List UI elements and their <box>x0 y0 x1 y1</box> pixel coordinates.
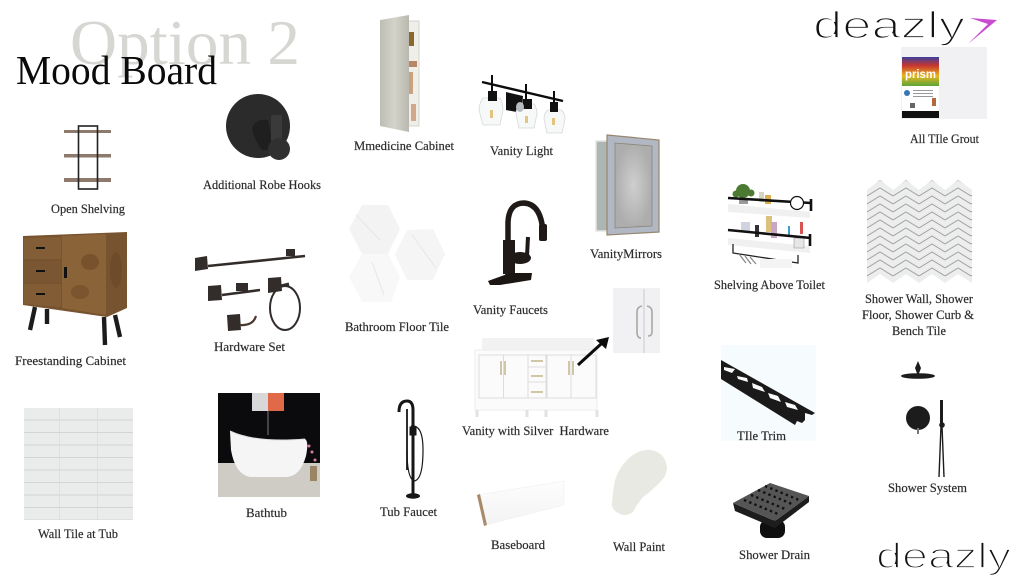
icon: wall shelves with accessories <box>728 184 811 268</box>
label: Bathtub <box>246 506 287 520</box>
icon: square black drain <box>733 483 809 538</box>
arrow: points to door detail <box>578 337 609 365</box>
icon: black metal trim strip <box>721 345 816 441</box>
label: three-line caption: Shower Wall, Shower <box>865 292 974 306</box>
item: vanity door detail <box>613 288 660 353</box>
icon: herringbone marble mosaic <box>867 180 972 283</box>
label: three-line caption: Floor, Shower Curb & <box>862 308 974 322</box>
item: shower wall and floor tile <box>862 180 974 338</box>
item: vanity mirrors <box>590 135 662 261</box>
label: Shower Drain <box>739 548 811 562</box>
item: shower system <box>888 361 967 495</box>
icon: floor-mounted black tub filler <box>399 401 423 498</box>
item: hardware set <box>195 249 305 354</box>
logo: deazly with pink arrow <box>813 5 997 47</box>
item: freestanding cabinet <box>15 232 127 368</box>
label: Mmedicine Cabinet <box>354 139 455 153</box>
title: Mood Board: Mood Board <box>16 47 217 93</box>
item: vanity faucets <box>473 203 548 317</box>
icon: white subway tile <box>24 408 133 520</box>
icon: three-tier shelf <box>64 126 111 189</box>
icon: towel bar, paper holder, hook and ring <box>195 249 305 331</box>
label: Tub Faucet <box>380 505 438 519</box>
label: Freestanding Cabinet <box>15 354 127 368</box>
item: shower drain <box>733 483 811 562</box>
icon: white baseboard piece <box>477 481 564 526</box>
label: three-line caption <box>862 292 974 338</box>
icon: three-globe black light <box>479 75 565 133</box>
item: vanity light <box>479 75 565 158</box>
icon: round black hook <box>226 94 290 160</box>
icon: open mirrored cabinet <box>380 15 419 132</box>
label: Vanity Faucets <box>473 303 548 317</box>
label: VanityMirrors <box>590 247 662 261</box>
logo: deazly with pink arrow: deazly <box>813 5 965 47</box>
logo: deazly footer: deazly <box>876 535 1011 576</box>
icon: rain head, valve and handheld <box>901 361 945 477</box>
label: Hardware Set <box>214 340 286 354</box>
label: TIle Trim <box>737 429 786 443</box>
item: all tile grout <box>901 47 987 146</box>
item: wall paint <box>612 450 667 554</box>
item: additional robe hooks <box>203 94 321 192</box>
item: open shelving <box>51 126 126 216</box>
item: tile trim <box>721 345 816 443</box>
item: medicine cabinet <box>354 15 455 153</box>
label: Baseboard <box>491 538 546 552</box>
icon: prism grout box: prism <box>905 67 936 81</box>
icon: rustic wood cabinet <box>23 232 127 345</box>
item: vanity with silver hardware <box>462 337 609 438</box>
icon: white double vanity <box>475 338 597 417</box>
item: wall tile at tub <box>24 408 133 541</box>
item: baseboard <box>477 481 564 552</box>
icon: white paint swatch <box>612 450 667 515</box>
icon: framed mirror cabinet <box>596 135 659 235</box>
icon: freestanding tub photo <box>218 393 320 497</box>
label: three-line caption: Bench Tile <box>892 324 946 338</box>
item: bathroom floor tile <box>345 205 449 334</box>
icon: dark bronze pull-down faucet <box>488 203 547 285</box>
icon: hexagonal marble tiles <box>349 205 445 302</box>
item: bathtub <box>218 393 320 520</box>
icon: cabinet door close-up with silver handles <box>613 288 660 353</box>
label: Open Shelving <box>51 202 126 216</box>
label: All TIle Grout <box>910 132 979 146</box>
subtitle: Option 2: Option 2 <box>70 8 300 78</box>
label: Bathroom Floor Tile <box>345 320 449 334</box>
label: Vanity with Silver Hardware <box>462 424 609 438</box>
item: shelving above toilet <box>714 184 826 292</box>
label: Wall Paint <box>613 540 666 554</box>
item: tub faucet <box>380 401 438 519</box>
label: Shower System <box>888 481 967 495</box>
label: Vanity Light <box>490 144 554 158</box>
label: Additional Robe Hooks <box>203 178 321 192</box>
label: Wall Tile at Tub <box>38 527 118 541</box>
label: Shelving Above Toilet <box>714 278 826 292</box>
